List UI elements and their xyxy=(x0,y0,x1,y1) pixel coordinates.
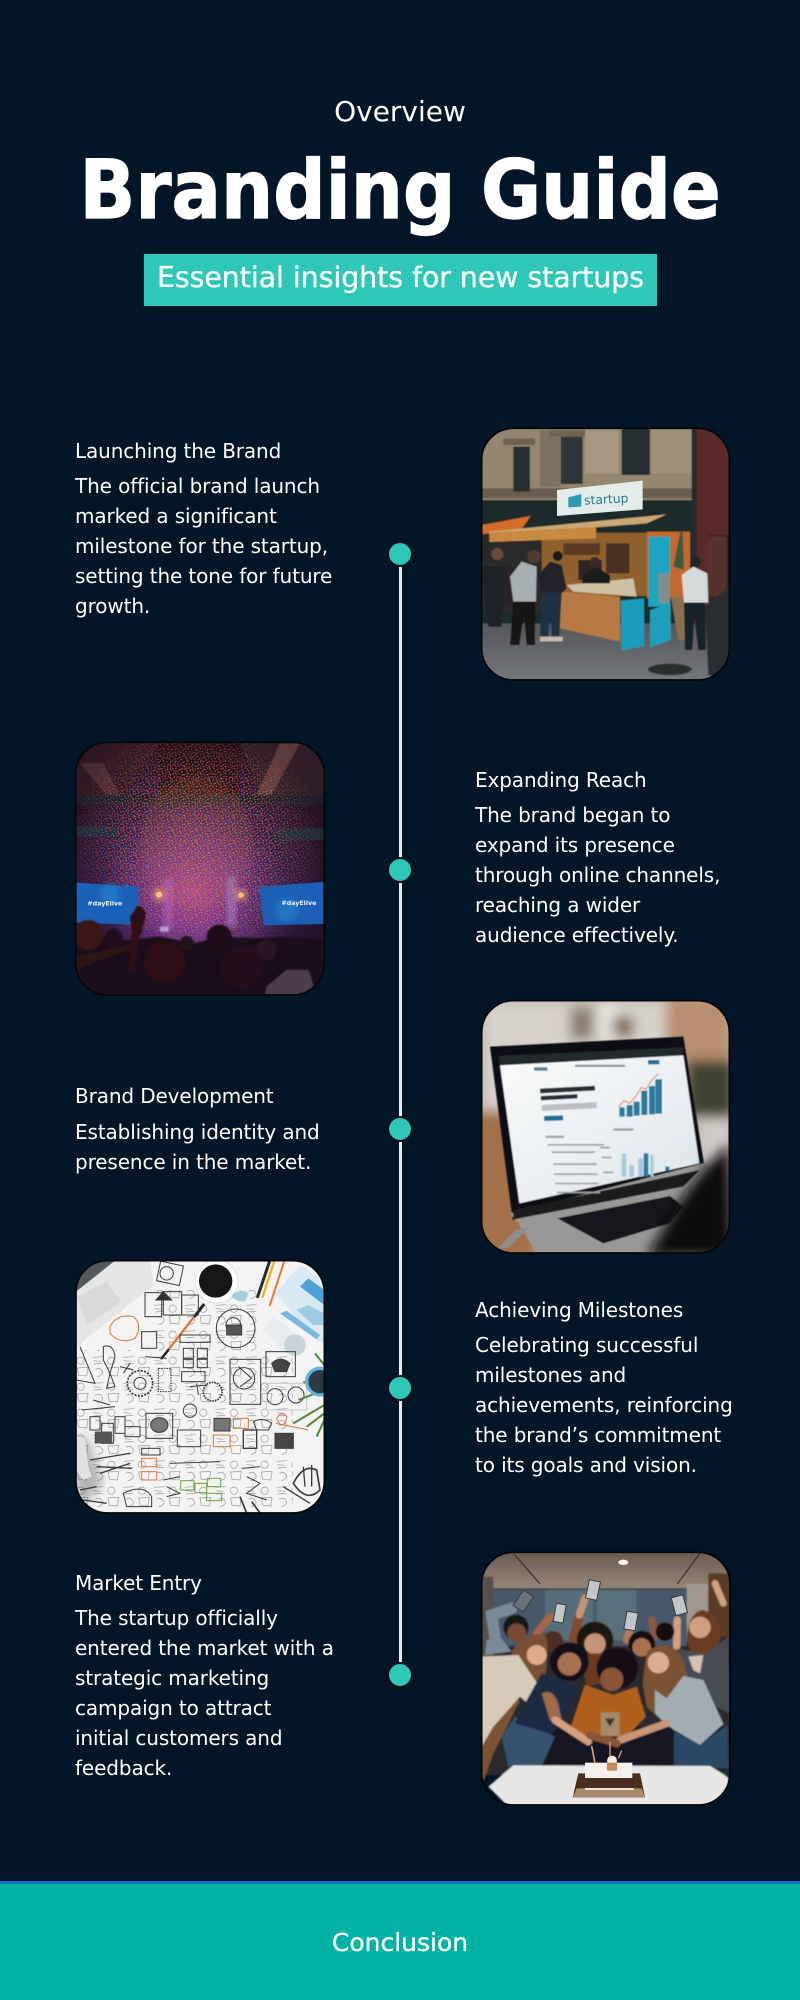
timeline dot 3 xyxy=(387,1116,413,1142)
back row people xyxy=(503,1615,529,1640)
marker sketches xyxy=(77,1261,320,1513)
footer: conclusion band xyxy=(0,1881,800,2000)
crowd silhouette xyxy=(73,906,324,995)
table xyxy=(488,1765,728,1807)
stage screens: #dayElive xyxy=(87,901,122,908)
lower table xyxy=(546,1128,633,1193)
text block: Brand Development xyxy=(75,1084,320,1174)
description: expand its presence xyxy=(475,833,675,857)
raised arms xyxy=(492,1583,723,1647)
description: campaign to attract xyxy=(75,1696,271,1720)
text block: Achieving Milestones xyxy=(475,1298,733,1477)
confetti cloud xyxy=(76,743,324,942)
conclusion label: Conclusion xyxy=(332,1928,468,1957)
description: The brand began to xyxy=(475,803,670,827)
photo: team celebrating with cake xyxy=(480,1552,731,1806)
glasses woman xyxy=(550,1642,589,1681)
description: milestone for the startup, xyxy=(75,534,328,558)
description: achievements, reinforcing xyxy=(475,1393,733,1417)
jeans xyxy=(502,1717,555,1767)
heading: Brand Development xyxy=(75,1084,274,1108)
stage screens xyxy=(77,882,323,925)
description: milestones and xyxy=(475,1363,626,1387)
browser bar xyxy=(498,1047,683,1065)
coffee cup xyxy=(195,1260,248,1303)
screen xyxy=(500,1055,699,1203)
photo: confetti concert xyxy=(74,742,326,996)
description: the brand’s commitment xyxy=(475,1423,721,1447)
stage screens: #dayElive xyxy=(281,900,316,907)
blue papers xyxy=(275,1265,324,1342)
heading: Launching the Brand xyxy=(75,439,281,463)
description xyxy=(474,803,720,947)
description: reaching a wider xyxy=(475,893,640,917)
chart bars xyxy=(619,1079,662,1117)
timeline line xyxy=(399,554,402,1675)
description: initial customers and xyxy=(75,1726,282,1750)
subtitle chip: Essential insights for new startups xyxy=(157,261,644,294)
right woman xyxy=(643,1645,688,1720)
text block: Launching the Brand xyxy=(74,439,332,618)
text block: Expanding Reach xyxy=(474,768,720,947)
heading: Expanding Reach xyxy=(475,768,647,792)
photo: startup street booth xyxy=(480,428,730,681)
outstretched arms xyxy=(555,1720,667,1743)
description xyxy=(75,1120,320,1174)
description: Celebrating successful xyxy=(475,1333,698,1357)
timeline dot 2 xyxy=(387,857,413,883)
raised phones xyxy=(513,1580,688,1631)
description: strategic marketing xyxy=(75,1666,269,1690)
description xyxy=(74,1606,334,1780)
description: through online channels, xyxy=(475,863,720,887)
scribble texture xyxy=(76,1290,293,1513)
description: to its goals and vision. xyxy=(475,1453,697,1477)
description: The official brand launch xyxy=(75,474,320,498)
description xyxy=(74,474,332,618)
description: audience effectively. xyxy=(475,923,678,947)
shop sign xyxy=(557,481,643,516)
description: marked a significant xyxy=(75,504,277,528)
description: feedback. xyxy=(75,1756,172,1780)
heading: Achieving Milestones xyxy=(475,1298,683,1322)
cake xyxy=(573,1742,645,1797)
heading: Market Entry xyxy=(75,1571,202,1595)
timeline dot 5 xyxy=(387,1662,413,1688)
title: Branding Guide xyxy=(80,144,721,238)
description: growth. xyxy=(75,594,150,618)
pencils xyxy=(162,1262,284,1358)
description: Establishing identity and xyxy=(75,1120,320,1144)
subtitle chip xyxy=(144,254,657,306)
laptop body xyxy=(490,1037,704,1220)
photo: laptop with dashboard xyxy=(480,1000,730,1254)
timeline dot 1 xyxy=(387,541,413,567)
description: presence in the market. xyxy=(75,1150,311,1174)
dark centre xyxy=(544,1726,726,1770)
header xyxy=(80,95,721,306)
left woman xyxy=(510,1634,548,1682)
description: The startup officially xyxy=(75,1606,278,1630)
shop sign: startup xyxy=(584,491,629,508)
description: setting the tone for future xyxy=(75,564,332,588)
headline lines xyxy=(540,1086,595,1093)
trophy xyxy=(601,1712,620,1736)
photo: logo sketches on desk xyxy=(75,1260,326,1514)
eyebrow: Overview: Overview xyxy=(334,95,466,128)
plant xyxy=(293,1353,324,1437)
text block: Market Entry xyxy=(74,1571,334,1780)
description: entered the market with a xyxy=(75,1636,334,1660)
description xyxy=(475,1333,733,1477)
centre woman xyxy=(597,1648,638,1689)
timeline dot 4 xyxy=(387,1375,413,1401)
